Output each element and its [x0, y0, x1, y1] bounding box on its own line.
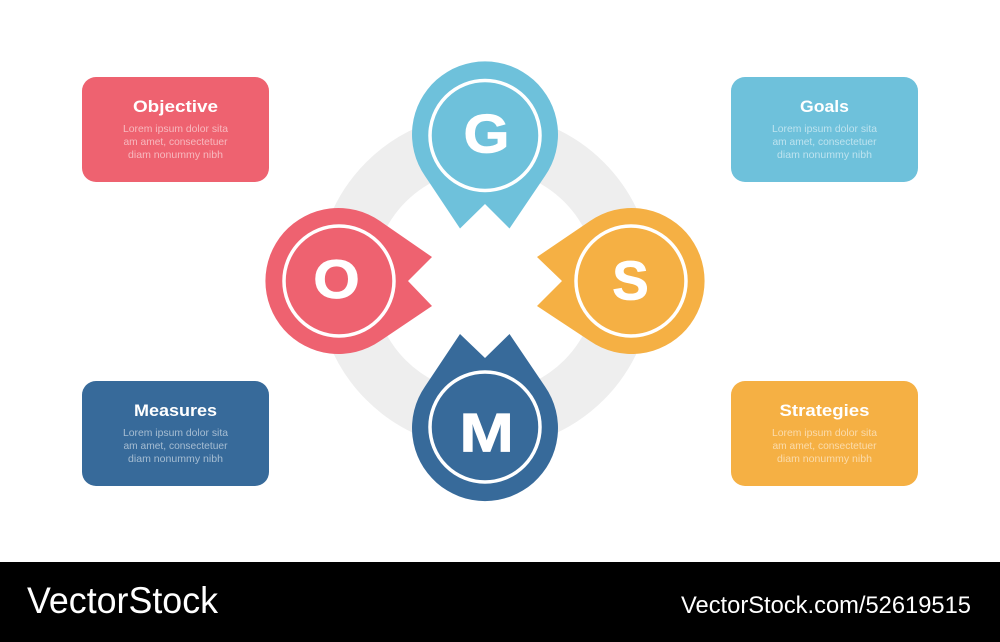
panel: Measures	[82, 381, 269, 486]
panel: Strategies: diam nonummy nibh	[777, 453, 872, 465]
background ring	[345, 141, 625, 421]
panel: Strategies: Strategies	[780, 401, 870, 420]
panel: Measures: Lorem ipsum dolor sita	[123, 427, 228, 439]
pin: O	[265, 208, 432, 354]
pin: M: M	[459, 401, 514, 463]
panel: Strategies	[731, 381, 918, 486]
footer band: VectorStock.com/52619515	[681, 592, 971, 619]
pin: S	[537, 208, 705, 354]
panel: Measures: Measures	[134, 401, 217, 420]
panel: Goals: Lorem ipsum dolor sita	[772, 123, 877, 135]
pin: G	[412, 61, 558, 228]
panel: Goals: am amet, consectetuer	[772, 136, 877, 148]
panel: Goals	[731, 77, 918, 182]
footer band: VectorStock	[27, 580, 218, 621]
panel: Strategies: am amet, consectetuer	[772, 440, 877, 452]
pin: G: G	[464, 102, 510, 164]
panel: Objective: Objective	[133, 97, 218, 116]
footer band	[0, 562, 1000, 642]
panel: Objective: Lorem ipsum dolor sita	[123, 123, 228, 135]
pin: O: O	[313, 248, 360, 310]
panel: Measures: am amet, consectetuer	[124, 440, 228, 452]
panel: Objective: am amet, consectetuer	[124, 136, 228, 148]
panel: Goals: Goals	[800, 97, 849, 116]
pin: M	[412, 334, 558, 501]
panel: Measures: diam nonummy nibh	[128, 453, 223, 465]
panel: Strategies: Lorem ipsum dolor sita	[772, 427, 877, 439]
panel: Objective: diam nonummy nibh	[128, 149, 223, 161]
pin: S: S	[612, 250, 649, 312]
panel: Objective	[82, 77, 269, 182]
panel: Goals: diam nonummy nibh	[777, 149, 872, 161]
